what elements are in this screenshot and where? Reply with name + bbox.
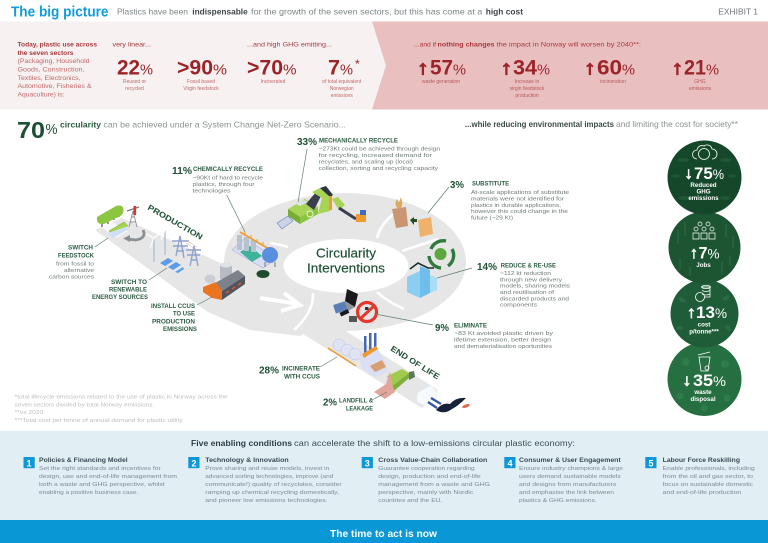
heading: reducing impacts bbox=[465, 119, 739, 129]
callout: 9% eliminate bbox=[435, 322, 553, 350]
icon: chemical recycling plant bbox=[232, 232, 278, 278]
intro text: Automotive, Fisheries & bbox=[18, 83, 92, 90]
callout: 14% reduce and re-use: ~112 kt reduction bbox=[500, 271, 551, 277]
stat: up 60%: % bbox=[622, 62, 635, 79]
stat: up 21%: 21 bbox=[684, 57, 706, 80]
stat: up 21%: % bbox=[706, 62, 719, 79]
condition 4: plastics & GHG emissions. bbox=[519, 498, 597, 504]
stat: 7% bbox=[322, 57, 362, 99]
circle: reduced GHG bbox=[668, 140, 742, 214]
callout: 2% landfill: LEAKAGE bbox=[346, 406, 373, 412]
circle: jobs bbox=[668, 212, 740, 284]
icon: trees and pumpjack bbox=[97, 206, 144, 242]
callout: 33% mechanically recycle: collection, sorting and recycling capacity bbox=[319, 166, 438, 172]
stat: up 34%: production bbox=[515, 93, 539, 99]
callout: renewable energy: ENERGY SOURCES bbox=[92, 295, 148, 301]
stat: 7%: 7 bbox=[328, 57, 340, 80]
circle: waste disposal: % bbox=[713, 374, 726, 389]
icon: substitute bags bbox=[392, 197, 433, 237]
circle: jobs: ↑ bbox=[690, 245, 698, 262]
stat: up 60% bbox=[584, 57, 635, 85]
title: The big picture bbox=[11, 4, 108, 20]
intro text: Aquaculture) is: bbox=[18, 92, 65, 98]
subtitle: high cost bbox=[486, 7, 523, 17]
condition 4: 4 bbox=[507, 458, 513, 468]
callout: 3% substitute: SUBSTITUTE bbox=[472, 181, 509, 187]
subtitle bbox=[117, 7, 523, 17]
exhibit label: EXHIBIT 1 bbox=[718, 7, 758, 17]
callout: switch feedstock: alternative bbox=[64, 268, 94, 274]
condition 1: Set the right standards and incentives for bbox=[39, 466, 161, 472]
condition 5: Enable professionals, including bbox=[663, 466, 755, 472]
stat: up 60%: ↑ bbox=[584, 58, 596, 79]
icon: coins bbox=[696, 285, 710, 302]
production strip bbox=[95, 218, 320, 336]
callout: 33% mechanically recycle: ~273Kt could be achieved through design bbox=[319, 147, 440, 153]
callout: 14% reduce and re-use: and reutilisation of bbox=[500, 290, 554, 296]
intro text: Textiles, Electronics, bbox=[18, 75, 81, 82]
stat: >90% bbox=[177, 57, 227, 92]
stat: 7%: * bbox=[355, 57, 360, 71]
icon: eliminate devices bbox=[333, 289, 376, 322]
condition 3: management from a waste and GHG bbox=[378, 482, 491, 488]
stat: up 34%: virgin feedstock bbox=[510, 86, 545, 92]
circle: reduced GHG: emissions bbox=[688, 195, 719, 202]
circle: reduced GHG: GHG bbox=[696, 188, 711, 196]
callout: install CCUS: PRODUCTION bbox=[152, 320, 195, 326]
condition 2: communicate!) quality of recyclates, consider bbox=[205, 482, 342, 488]
circle: waste disposal: ↓ bbox=[682, 372, 692, 390]
callout: 2% landfill: LANDFILL & bbox=[339, 398, 374, 404]
centre title bbox=[307, 246, 385, 276]
stat: up 34%: % bbox=[537, 62, 550, 79]
impact circles bbox=[668, 140, 742, 416]
worsening heading bbox=[414, 42, 641, 49]
stat: up 34% bbox=[500, 57, 550, 99]
ring centre bbox=[284, 239, 408, 293]
callout: install CCUS: INSTALL CCUS bbox=[151, 304, 195, 310]
stat: 7%: Norwegian bbox=[330, 86, 354, 92]
stat: up 60%: incineration bbox=[600, 79, 626, 85]
callout: 14% reduce and re-use: through new delivery bbox=[500, 277, 562, 283]
intro text: Goods, Construction, bbox=[18, 66, 85, 74]
condition 4: Consumer & User Engagement bbox=[519, 457, 622, 464]
callout: 11% chemically recycle: technologies bbox=[192, 188, 231, 194]
condition 1: design, use and end-of-life management from bbox=[39, 474, 177, 480]
circle: jobs: Jobs bbox=[696, 262, 711, 269]
icon: people bbox=[693, 222, 715, 239]
heading: reducing impacts: ...while reducing environmental impacts bbox=[465, 119, 614, 129]
callout: 3% substitute bbox=[450, 179, 569, 221]
circle: cost per tonne bbox=[670, 280, 738, 348]
subtitle: for the growth of the seven sectors, but this has come at a bbox=[251, 7, 483, 17]
callout: 33% mechanically recycle: 33% bbox=[297, 136, 318, 148]
footnotes: *total lifecycle emissions related to the use of plastic in Norway across the bbox=[15, 395, 228, 401]
banner: the time to act is now: The time to act is now bbox=[330, 528, 438, 540]
callout: 28% incinerate: INCINERATE bbox=[282, 366, 320, 372]
callout: 28% incinerate: 28% bbox=[259, 365, 280, 377]
circle: cost per tonne: p/tonne*** bbox=[689, 328, 719, 336]
callout: 9% eliminate: and dematerialisation oportunities bbox=[454, 344, 552, 350]
panel: enabling conditions bbox=[0, 431, 768, 520]
heading: 70% circularity: % bbox=[46, 121, 58, 138]
condition 5: 5 bbox=[648, 458, 654, 468]
circle: reduced GHG: Reduced bbox=[690, 182, 717, 189]
stat: 22%: recycled bbox=[125, 86, 144, 92]
callout: 33% mechanically recycle: for recycling, increased demand for bbox=[319, 153, 432, 159]
callout: 33% mechanically recycle bbox=[297, 136, 440, 172]
callout: 3% substitute: materials were not identified for bbox=[471, 196, 564, 202]
stat: 22%: % bbox=[140, 62, 153, 79]
enabling heading: Five enabling conditions bbox=[191, 438, 292, 448]
stat: 22% bbox=[117, 57, 153, 92]
callout: 9% eliminate: ELIMINATE bbox=[454, 323, 487, 329]
icon: wind turbines bbox=[146, 224, 172, 262]
enabling heading: can accelerate the shift to a low-emissions circular plastic economy: bbox=[294, 438, 575, 448]
callout: 11% chemically recycle: 11% bbox=[172, 165, 193, 177]
stat: up 34%: 34 bbox=[513, 57, 537, 80]
icon: bin bbox=[698, 352, 710, 371]
stat: >90%: % bbox=[213, 62, 227, 79]
heading: 70% circularity: circularity bbox=[60, 120, 101, 130]
callout: switch feedstock bbox=[49, 246, 95, 280]
callout: 3% substitute: At-scale applications of substitute bbox=[471, 190, 569, 196]
intro text: (Packaging, Household bbox=[18, 58, 90, 65]
intro text: the seven sectors bbox=[18, 50, 74, 57]
condition 1: 1 bbox=[26, 458, 32, 468]
callout: 2% landfill bbox=[323, 397, 374, 412]
callout: 14% reduce and re-use: discarded products and bbox=[500, 296, 569, 302]
condition 1: both a waste and GHG perspective, whilst bbox=[39, 482, 165, 488]
callout: 14% reduce and re-use: components bbox=[500, 303, 537, 309]
intro text bbox=[18, 42, 98, 98]
high GHG heading: ...and high GHG emitting... bbox=[247, 42, 332, 48]
centre title: Interventions bbox=[307, 262, 385, 276]
stat: 7%: % bbox=[340, 62, 353, 79]
stat: >70%: >70 bbox=[247, 57, 283, 80]
callout: 9% eliminate: lifetime extension, better design bbox=[454, 338, 551, 344]
stat: up 57%: % bbox=[453, 62, 466, 79]
stat: up 21% bbox=[672, 57, 719, 92]
condition 2: advanced sorting technologies, improve (and bbox=[205, 474, 333, 480]
curved label: production: PRODUCTION bbox=[146, 203, 204, 242]
subtitle: Plastics have been bbox=[117, 7, 188, 17]
condition 5: from the oil and gas sector, to bbox=[663, 474, 753, 480]
callout: 14% reduce and re-use bbox=[477, 261, 570, 309]
worsening heading: the impact in Norway will worsen by 2040**: bbox=[496, 42, 641, 49]
callout: switch feedstock: FEEDSTOCK bbox=[58, 254, 95, 260]
circle: cost per tonne: % bbox=[715, 306, 727, 321]
stat: up 60%: 60 bbox=[597, 57, 622, 80]
circle: reduced GHG: % bbox=[713, 167, 724, 182]
icon: mechanical recycling machine bbox=[277, 186, 366, 229]
icon: pylons bbox=[172, 236, 201, 266]
footnotes: seven sectors divided by total Norway emissions. bbox=[15, 402, 155, 408]
condition 4: users demand sustainable models bbox=[519, 474, 621, 480]
heading: reducing impacts: and limiting the cost for society** bbox=[616, 119, 739, 129]
callout: 11% chemically recycle: plastics, through four bbox=[192, 182, 255, 188]
enabling heading bbox=[191, 438, 575, 448]
stat: >90%: Fossil based bbox=[187, 79, 215, 85]
callout: 3% substitute: however this could change in the bbox=[471, 209, 568, 215]
subtitle: indispensable bbox=[192, 7, 248, 17]
callout: renewable energy: RENEWABLE bbox=[109, 288, 147, 294]
callout: install CCUS: EMISSIONS bbox=[163, 327, 197, 333]
circle: jobs: 7 bbox=[698, 244, 708, 262]
panel: 2040 worsening impact bbox=[372, 22, 768, 110]
condition 5: Labour Force Reskilling bbox=[663, 457, 740, 464]
condition 1 bbox=[24, 457, 177, 496]
condition 5: focus on sustainable domestic bbox=[663, 482, 753, 488]
centre title: Circularity bbox=[316, 246, 377, 260]
callout: install CCUS: TO USE bbox=[173, 312, 195, 318]
callout: 11% chemically recycle: ~90Kt of hard to recycle bbox=[192, 176, 263, 182]
panel: today's linear plastic use bbox=[0, 22, 768, 110]
condition 2: and pioneer low emissions technologies. bbox=[205, 498, 328, 504]
circle: cost per tonne: cost bbox=[698, 322, 710, 328]
stat: up 57%: ↑ bbox=[417, 58, 428, 79]
condition 3: countries and the EU. bbox=[378, 498, 443, 504]
worsening heading: nothing changes bbox=[438, 42, 495, 49]
end of life strip bbox=[295, 326, 438, 408]
stat: up 21%: emissions bbox=[689, 86, 712, 92]
condition 3: Guarantee cooperation regarding bbox=[378, 466, 475, 472]
ring bbox=[224, 193, 466, 331]
condition 3 bbox=[362, 457, 491, 504]
stat: 7%: emissions bbox=[331, 93, 353, 99]
stat: up 57%: 57 bbox=[430, 57, 453, 80]
circle: jobs: % bbox=[708, 246, 720, 262]
callout: 9% eliminate: ~83 Kt avoided plastic driven by bbox=[454, 331, 553, 337]
circle: cost per tonne: 13 bbox=[696, 303, 715, 322]
circle: reduced GHG: ↓ bbox=[684, 166, 693, 182]
icon: reduce and re-use bbox=[407, 241, 454, 298]
stat: up 57% bbox=[417, 57, 466, 85]
condition 3: Cross Value-Chain Collaboration bbox=[378, 457, 487, 464]
very linear heading: very linear... bbox=[112, 42, 151, 48]
stat: up 21%: ↑ bbox=[672, 58, 683, 79]
callout: 28% incinerate: WITH CCUS bbox=[284, 374, 320, 380]
callout: switch feedstock: from fossil to bbox=[56, 262, 94, 268]
condition 2: 2 bbox=[191, 458, 197, 468]
stat: 22%: 22 bbox=[117, 57, 140, 80]
callout: 11% chemically recycle: CHEMICALLY RECYCLE bbox=[193, 167, 263, 173]
callout: 2% landfill: 2% bbox=[323, 397, 338, 409]
callout: renewable energy: SWITCH TO bbox=[111, 280, 147, 286]
arrow on ring bbox=[260, 293, 300, 311]
leader lines bbox=[95, 149, 472, 400]
stat: up 57%: waste generation bbox=[422, 79, 460, 85]
callout: 11% chemically recycle bbox=[172, 165, 263, 194]
callout: switch feedstock: carbon sources bbox=[49, 274, 94, 280]
stat: up 34%: ↑ bbox=[500, 58, 512, 79]
condition 5: and end-of-life production bbox=[663, 490, 741, 496]
heading: 70% circularity: can be achieved under a System Change Net-Zero Scenario... bbox=[104, 120, 346, 130]
icon: landfill waste bbox=[374, 371, 395, 399]
icon: CCUS factory bbox=[203, 262, 245, 300]
icon: outfall and spill bbox=[417, 385, 470, 412]
callout: 33% mechanically recycle: recyclates, and scaling up (local) bbox=[319, 160, 413, 166]
callout: 28% incinerate bbox=[259, 365, 320, 380]
icon: incineration with CCUS bbox=[328, 333, 388, 377]
circle: waste disposal: 35 bbox=[693, 371, 713, 390]
condition 4: and designs from manufacturers bbox=[519, 482, 616, 488]
condition 1: enabling a positive business case. bbox=[39, 490, 139, 496]
icon: cloud bbox=[692, 145, 717, 160]
curved label: end of life: END OF LIFE bbox=[389, 344, 442, 382]
stat: up 34%: Increase in bbox=[515, 79, 539, 85]
intro text: Today, plastic use across bbox=[18, 42, 98, 48]
icon: solar panels bbox=[160, 258, 184, 273]
callout: 14% reduce and re-use: REDUCE & RE-USE bbox=[501, 263, 556, 269]
callout: 9% eliminate: 9% bbox=[435, 322, 450, 334]
stat: >70% bbox=[247, 57, 296, 85]
circle: waste disposal bbox=[668, 342, 742, 416]
condition 3: perspective, mainly with Nordic bbox=[378, 490, 473, 496]
condition 2: ramping up chemical recycling domestically, bbox=[205, 490, 339, 496]
callout: install CCUS bbox=[151, 304, 197, 333]
circle: reduced GHG: 75 bbox=[694, 164, 713, 183]
stat: up 21%: GHG bbox=[694, 79, 706, 85]
worsening heading: ...and if bbox=[414, 42, 436, 49]
callout: switch feedstock: SWITCH bbox=[68, 246, 93, 252]
footnotes bbox=[15, 395, 228, 424]
diagram: circularity interventions ring bbox=[95, 193, 466, 408]
circle: cost per tonne: ↑ bbox=[687, 304, 696, 322]
callout: 3% substitute: plastics in durable applications, bbox=[471, 203, 561, 209]
stat: >70%: % bbox=[283, 62, 296, 79]
circle: waste disposal: waste bbox=[693, 389, 712, 396]
condition 5 bbox=[645, 457, 755, 496]
condition 4: Ensure industry champions & large bbox=[519, 466, 623, 472]
condition 2 bbox=[188, 457, 342, 504]
condition 3: design, production and end-of-life bbox=[378, 474, 481, 480]
condition 4: and emphasise the link between bbox=[519, 490, 614, 496]
condition 2: Technology & Innovation bbox=[205, 457, 289, 464]
stat: >70%: Incinerated bbox=[261, 79, 286, 85]
callout: 3% substitute: 3% bbox=[450, 179, 465, 191]
callout: 14% reduce and re-use: 14% bbox=[477, 261, 498, 273]
stat: >90%: >90 bbox=[177, 57, 213, 80]
stat: 22%: Reused or bbox=[123, 79, 146, 85]
stat: >90%: Virgin feedstock bbox=[183, 86, 219, 92]
banner: the time to act is now bbox=[0, 520, 768, 543]
condition 4 bbox=[504, 457, 623, 504]
callout: 3% substitute: future (~29 Kt) bbox=[471, 215, 513, 221]
condition 1: Policies & Financing Model bbox=[39, 457, 128, 464]
footnotes: **vs 2020 bbox=[15, 410, 43, 416]
callout: 14% reduce and re-use: models, sharing models bbox=[500, 284, 570, 290]
condition 2: Prove sharing and reuse models, invest in bbox=[205, 466, 329, 472]
circle: waste disposal: disposal bbox=[690, 396, 716, 403]
callout: 33% mechanically recycle: MECHANICALLY RECYCLE bbox=[319, 138, 398, 144]
footnotes: ***Total cost per tonne of annual demand for plastic utility bbox=[15, 418, 183, 424]
stat: 7%: of total equivalent bbox=[322, 79, 362, 85]
callout: renewable energy bbox=[92, 280, 148, 301]
condition 3: 3 bbox=[365, 458, 370, 468]
heading: 70% circularity bbox=[17, 117, 346, 143]
heading: 70% circularity: 70 bbox=[17, 117, 45, 143]
icon: garbage truck bbox=[387, 369, 415, 391]
